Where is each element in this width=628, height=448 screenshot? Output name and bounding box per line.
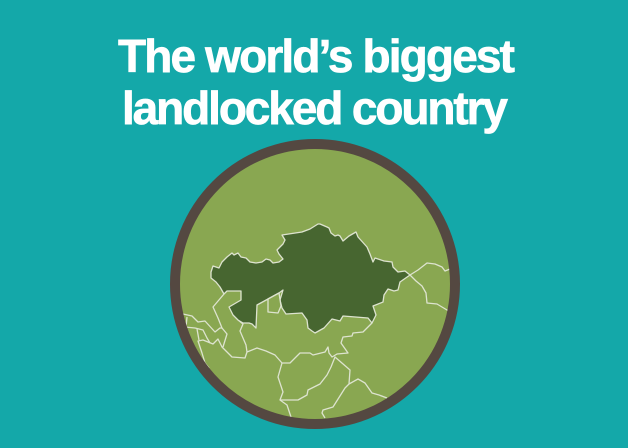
Kazakhstan <box>211 224 410 333</box>
title: The world’s biggest <box>118 30 515 82</box>
title <box>118 30 515 134</box>
globe ring <box>175 144 455 424</box>
map globe <box>175 144 456 424</box>
globe land disc <box>175 144 455 424</box>
neighbouring country borders <box>183 263 456 418</box>
Aral Sea area <box>268 293 281 313</box>
title: landlocked country <box>122 82 508 134</box>
